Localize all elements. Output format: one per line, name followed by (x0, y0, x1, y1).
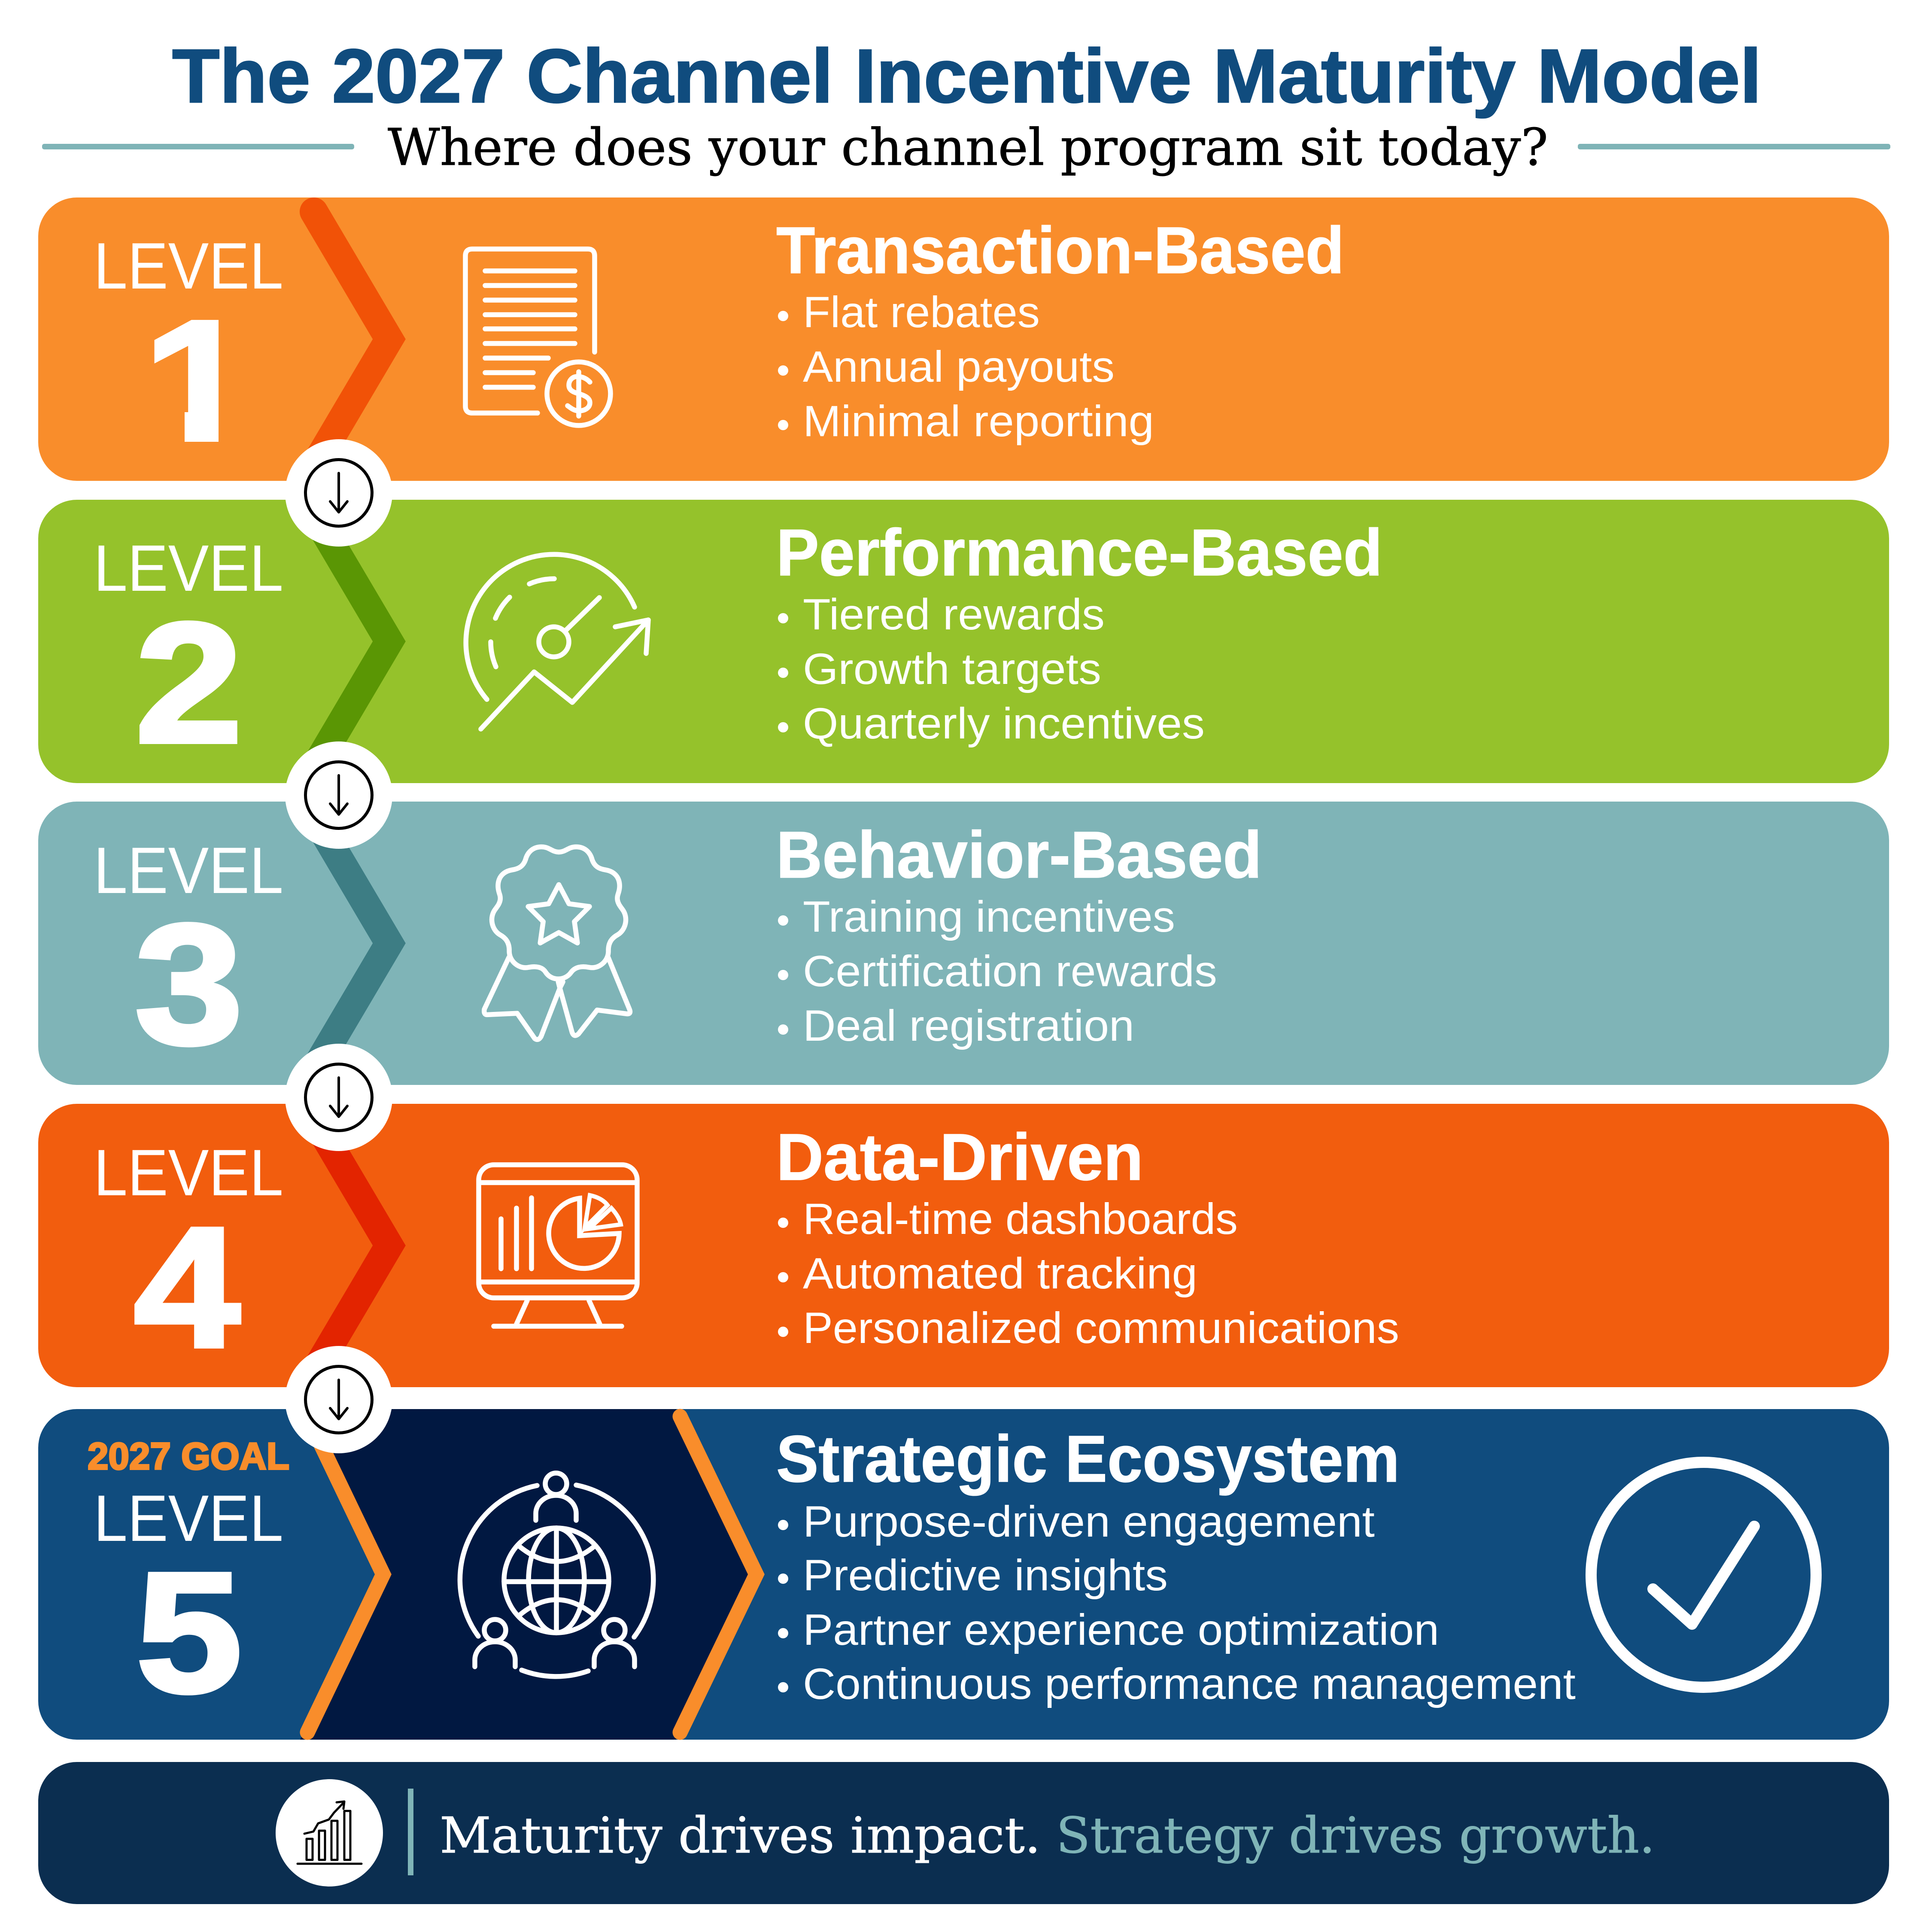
subtitle with rules (42, 118, 1890, 177)
chevron level 4 (314, 1118, 389, 1373)
bullet list level 4: Personalized communications (803, 1303, 1399, 1352)
panel: level 3 (38, 802, 1889, 1085)
panel: level 1 (38, 197, 1889, 481)
arrow connector 3 (285, 1044, 392, 1151)
bullet list level 5: Partner experience optimization (803, 1605, 1439, 1654)
panel: level 5 goal (38, 1409, 1889, 1740)
icon: check circle (1591, 1462, 1816, 1687)
level label 4: LEVEL (94, 1136, 283, 1209)
bullet list level 5: Purpose-driven engagement (803, 1497, 1375, 1546)
heading level 1: Transaction-Based (776, 213, 1344, 287)
footer statement (440, 1807, 1655, 1865)
bullet list level 4: Automated tracking (803, 1249, 1197, 1298)
bullet list level 2: Quarterly incentives (803, 699, 1205, 748)
level label 2: LEVEL (94, 532, 283, 605)
level number 5: 5 (136, 1537, 242, 1728)
icon: dashboard monitor (479, 1165, 637, 1326)
icon: gauge with growth arrow (466, 554, 648, 729)
goal tag: 2027 GOAL (88, 1435, 289, 1477)
title: The 2027 Channel Incentive Maturity Model (172, 33, 1762, 118)
icon: growth chart badge (276, 1779, 383, 1886)
panel: level 4 (38, 1104, 1889, 1387)
chevron level 2 (314, 514, 389, 769)
arrow connector 1 (285, 439, 392, 547)
bullet list level 5: Continuous performance management (803, 1659, 1576, 1708)
bullet list level 1: Flat rebates (803, 288, 1040, 337)
level number 2: 2 (135, 588, 243, 778)
heading level 5: Strategic Ecosystem (776, 1422, 1400, 1496)
bullet list level 2: Tiered rewards (803, 590, 1105, 639)
bullet list level 2 (778, 590, 1205, 748)
icon: globe with people (460, 1473, 653, 1677)
bullet list level 5 (778, 1497, 1576, 1708)
panel: level 2 (38, 500, 1889, 783)
bullet list level 2: Growth targets (803, 644, 1101, 693)
bullet list level 4: Real-time dashboards (803, 1194, 1238, 1243)
level number 4: 4 (134, 1192, 241, 1383)
navy icon band (300, 1409, 756, 1740)
level number 1 (155, 320, 219, 442)
arrow connector 4 (285, 1346, 392, 1453)
bullet list level 3: Certification rewards (803, 947, 1217, 996)
footer statement: Strategy drives growth. (1056, 1807, 1655, 1865)
bullet list level 5: Predictive insights (803, 1551, 1168, 1600)
bullet list level 1 (778, 288, 1154, 446)
chevron level 1 (314, 212, 389, 467)
footer banner (38, 1762, 1889, 1904)
bullet list level 3: Training incentives (803, 892, 1175, 941)
heading level 4: Data-Driven (776, 1120, 1143, 1194)
chevron left level 5 (307, 1416, 383, 1732)
level label 5: LEVEL (94, 1482, 283, 1555)
level label 3: LEVEL (94, 834, 283, 907)
subtitle with rules: Where does your channel program sit today? (388, 118, 1548, 177)
level number 1: 1 (143, 286, 257, 476)
bullet list level 3: Deal registration (803, 1001, 1134, 1050)
footer statement: Maturity drives impact. (440, 1807, 1041, 1865)
chevron level 3 (314, 816, 389, 1071)
bullet list level 1: Minimal reporting (803, 397, 1154, 446)
bullet list level 3 (778, 892, 1217, 1050)
bullet list level 1: Annual payouts (803, 342, 1115, 391)
bullet list level 4 (778, 1194, 1399, 1352)
heading level 3: Behavior-Based (776, 818, 1262, 892)
icon: invoice with dollar coin (465, 249, 611, 425)
chevron right level 5 (680, 1416, 756, 1732)
heading level 2: Performance-Based (776, 516, 1382, 589)
level number 3: 3 (135, 889, 243, 1080)
level label 1: LEVEL (94, 229, 283, 303)
arrow connector 2 (285, 741, 392, 849)
icon: award ribbon with star (484, 847, 630, 1039)
footer divider (408, 1789, 413, 1875)
